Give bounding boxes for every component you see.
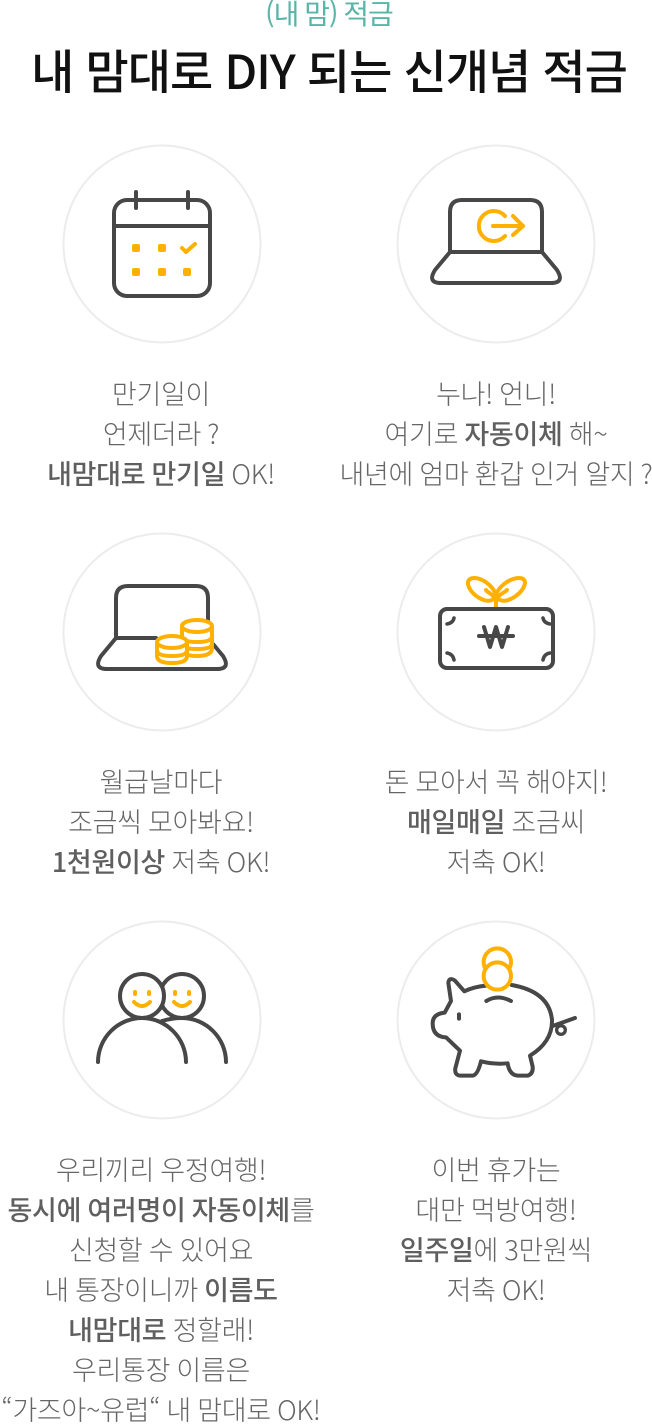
text: item 1: 만기일이 [112,373,210,412]
icon: banknote with sprout [398,534,594,730]
icon: calendar [64,146,260,342]
title: 내 맘대로 DIY 되는 신개념 적금 [31,34,627,103]
text: item 3: 1천원이상 저축 OK! [52,841,270,880]
text: item 4: 저축 OK! [447,841,545,880]
text: item 2: 내년에 엄마 환갑 인거 알지 ? [339,453,652,492]
text: item 4 [385,761,607,880]
text: item 2 [339,373,652,492]
icon: two smiling friends [64,922,260,1118]
text: item 6: 이번 휴가는 [432,1149,560,1188]
text: item 4: 매일매일 조금씨 [407,801,585,840]
text: item 5: 신청할 수 있어요 [69,1229,253,1268]
text: item 4: 돈 모아서 꼭 해야지! [385,761,607,800]
icon: piggy bank with coins [398,922,594,1118]
text: item 1: 내맘대로 만기일 OK! [47,453,275,492]
text: item 3 [52,761,270,880]
text: item 3: 조금씩 모아봐요! [68,801,254,840]
text: item 5: 내 통장이니까 이름도 [44,1269,278,1308]
text: item 6: 저축 OK! [447,1269,545,1308]
text: item 6 [400,1149,592,1308]
text: item 5: 우리통장 이름은 [72,1349,250,1388]
text: item 1 [47,373,275,492]
text: item 2: 여기로 자동이체 해~ [384,413,608,452]
text: item 3: 월급날마다 [100,761,222,800]
icon: laptop with transfer arrow [398,146,594,342]
text: item 5 [1,1149,321,1424]
text: item 6: 일주일에 3만원씩 [400,1229,592,1268]
text: item 1: 언제더라 ? [103,413,219,452]
text: item 2: 누나! 언니! [436,373,556,412]
icon: laptop with coins [64,534,260,730]
text: item 5: 내맘대로 정할래! [68,1309,254,1348]
text: item 5: 동시에 여러명이 자동이체를 [7,1189,314,1228]
text: item 5: 우리끼리 우정여행! [56,1149,266,1188]
text: item 6: 대만 먹방여행! [415,1189,577,1228]
